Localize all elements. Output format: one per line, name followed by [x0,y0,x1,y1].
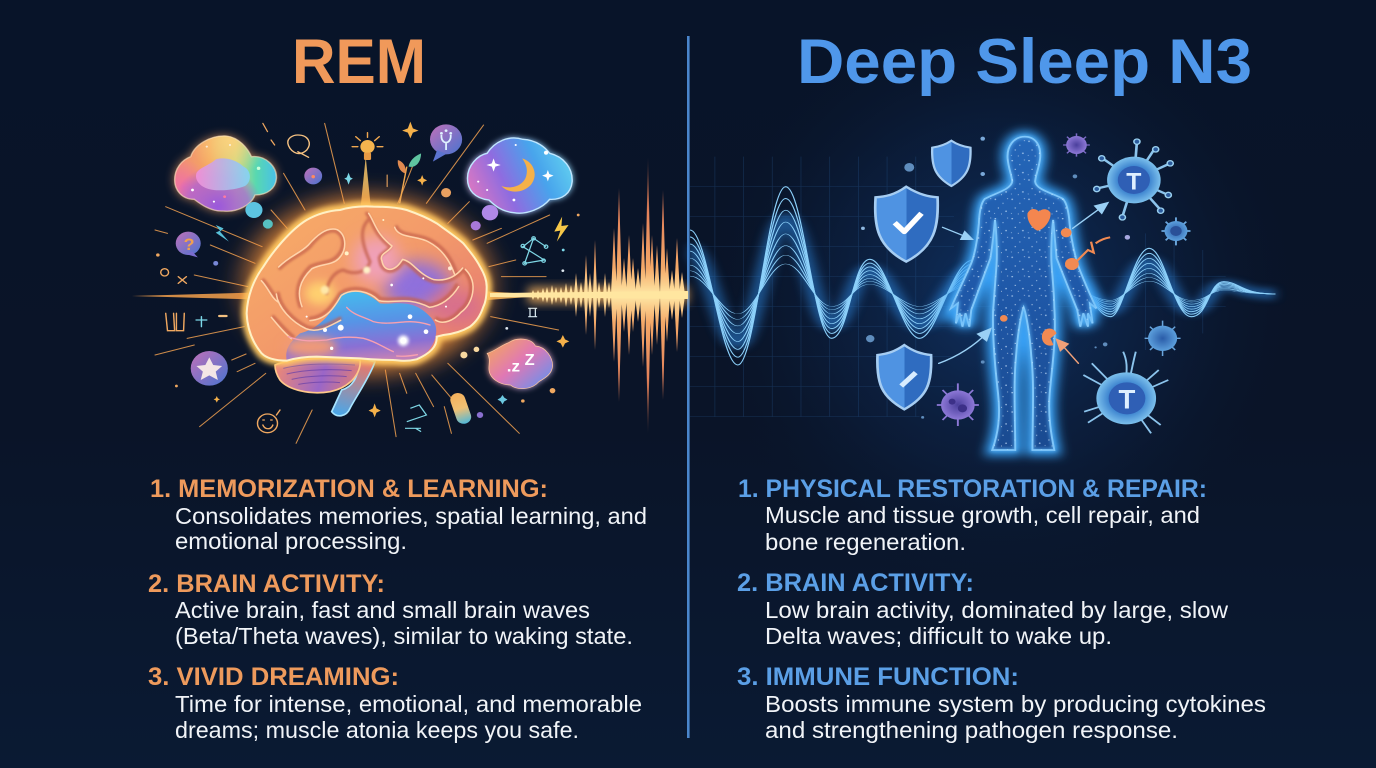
dream cloud: Zz [487,339,553,389]
REM point 1: Consolidates memories, spatial learning, and [175,503,647,529]
illustration: deep sleep body and delta waves [690,133,1275,450]
brain outer glow [228,183,507,387]
body halo [951,137,1096,450]
Deep Sleep point 2 [737,569,1229,649]
small floating dots [861,137,1107,419]
heart [1027,209,1051,231]
star badge [191,351,228,386]
REM point 2: 2. BRAIN ACTIVITY: [148,570,385,598]
T cell upper [1094,139,1173,220]
illustration: REM brain with dreams [132,122,580,443]
dream cloud sparkles left [191,144,260,203]
REM point 1: emotional processing. [175,528,407,554]
Deep Sleep point 1: 1. PHYSICAL RESTORATION & REPAIR: [738,475,1207,503]
brain hot rim [247,206,487,361]
cloud stars [477,144,554,201]
inner cloud [196,158,250,190]
small dots [156,188,580,418]
Deep Sleep point 3: and strengthening pathogen response. [765,717,1178,743]
body particles [951,137,1096,450]
brain fold shadows [263,213,471,337]
burst rays [132,123,559,443]
Deep Sleep point 2: Delta waves; difficult to wake up. [765,623,1112,649]
spectrum: fast REM brain waves [490,157,688,433]
brain colour shading [283,237,483,361]
REM point 2: Active brain, fast and small brain waves [175,597,590,623]
icons: network doodles [405,237,548,432]
REM point 1 [150,475,647,554]
title: Deep Sleep N3: Deep Sleep N3 [797,27,1252,97]
Zz text: .z [507,357,520,376]
Deep Sleep point 1: bone regeneration. [765,529,966,555]
brain fold highlights [261,213,473,339]
spectrum center line [490,291,688,299]
temporal lobe [286,291,436,361]
REM point 3 [148,663,642,743]
Deep Sleep point 2: Low brain activity, dominated by large, slow [765,597,1229,623]
shield bottom [877,345,931,409]
REM point 1: 1. MEMORIZATION & LEARNING: [150,475,548,503]
lobe lines [288,307,430,356]
body inner glow [951,137,1096,450]
cerebellum [275,358,360,393]
icons: stars and sparkles [214,122,569,417]
speech bubble [430,124,462,162]
light bulb [352,133,383,160]
REM point 3: Time for intense, emotional, and memorable [175,691,642,717]
Deep Sleep point 3: Boosts immune system by producing cytokines [765,691,1266,717]
dream cloud: moon [467,138,572,213]
brain stem [332,358,375,416]
dream cloud: colourful [175,136,276,211]
wave grid [690,157,1226,417]
question bubble [176,232,201,257]
Zz capital: Z [525,352,535,369]
brain [247,206,487,416]
delta wave glow [690,219,1275,344]
shield top [932,141,971,186]
viruses [937,133,1191,426]
T cell upper: T [1126,169,1142,195]
repair spots [1000,228,1130,346]
brain sparkles [306,219,452,350]
spectrum glow [528,287,688,303]
Deep Sleep point 3 [737,663,1266,743]
icons: small line doodles [161,123,387,433]
Deep Sleep point 1 [738,475,1207,555]
Deep Sleep point 3: 3. IMMUNE FUNCTION: [737,663,1019,691]
delta wave strands [690,187,1275,365]
Deep Sleep point 2: 2. BRAIN ACTIVITY: [737,569,974,597]
brain outline [247,206,487,361]
T cell lower: T [1118,384,1136,414]
REM point 2 [148,570,633,649]
REM point 2: (Beta/Theta waves), similar to waking state. [175,623,633,649]
shield with check [875,187,938,262]
REM point 3: 3. VIVID DREAMING: [148,663,399,691]
title: REM: REM [292,27,426,97]
crescent moon [501,158,535,192]
arrows [939,203,1108,363]
thought bubbles [245,168,498,230]
human body [951,137,1096,450]
question bubble: ? [184,235,194,254]
REM point 3: dreams; muscle atonia keeps you safe. [175,717,579,743]
brain main [247,206,487,361]
panel: Deep Sleep text [737,475,1266,743]
center divider [687,36,690,738]
pill [448,391,473,426]
leaf sprout [398,153,421,203]
panel: REM text [148,475,647,743]
spectrum bars [531,157,685,433]
Deep Sleep point 1: Muscle and tissue growth, cell repair, and [765,502,1200,528]
T cell lower [1083,352,1168,433]
